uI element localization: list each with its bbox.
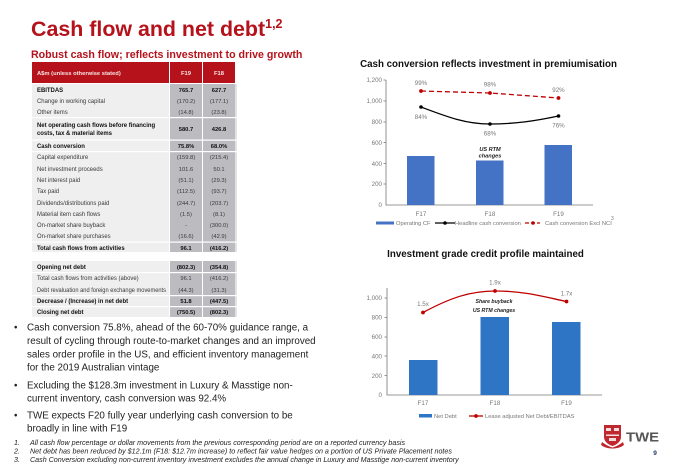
- table cash flow rows: Other items: [37, 110, 68, 116]
- table cash flow rows: [37, 88, 228, 252]
- axis labels: 200: [372, 181, 383, 188]
- data labels: [417, 280, 573, 308]
- table cash flow rows: -: [185, 223, 187, 229]
- legend: [419, 414, 575, 420]
- table cash flow rows: Dividends/distributions paid: [37, 201, 109, 207]
- table cash flow rows: Tax paid: [37, 189, 59, 195]
- icon: crest: [601, 425, 624, 448]
- table cash flow rows: (112.5): [177, 189, 195, 195]
- table cash flow rows: Change in working capital: [37, 99, 105, 105]
- axes: [384, 80, 593, 205]
- line: cash conversion excl NCI: [419, 89, 560, 100]
- footnotes: 2.: [13, 448, 20, 456]
- table cash flow rows: Net investment proceeds: [37, 167, 103, 173]
- table cash flow rows: Net interest paid: [37, 178, 80, 184]
- title: Cash flow and net debt: [31, 17, 265, 41]
- table cash flow rows: Material item cash flows: [37, 212, 100, 218]
- commentary bullets: sales order profile in the US, and efficient inventory management: [27, 350, 309, 360]
- axis labels: 1,000: [367, 98, 383, 105]
- table net debt rows: [37, 265, 228, 316]
- table cash flow rows: 101.6: [179, 167, 193, 173]
- axis labels: 200: [372, 373, 383, 380]
- table cash flow rows: 75.8%: [178, 144, 194, 150]
- table cash flow rows: 426.8: [212, 127, 227, 133]
- axis labels: [367, 77, 564, 218]
- axis labels: 600: [372, 334, 383, 341]
- axis labels: 1,200: [367, 77, 383, 84]
- commentary bullets: [14, 322, 316, 434]
- data labels: 1.7x: [561, 290, 573, 298]
- table cash flow rows: (416.2): [210, 246, 228, 252]
- table cash flow rows: (29.3): [211, 178, 227, 184]
- table upper body shading: [32, 84, 237, 252]
- axis labels: 400: [372, 161, 383, 168]
- table header: F18: [214, 71, 225, 77]
- axis labels: 0: [379, 202, 383, 209]
- title: 1,2: [265, 17, 283, 31]
- axis labels: 0: [379, 392, 383, 399]
- table net debt shading: [32, 261, 237, 317]
- commentary bullets: Cash conversion 75.8%, ahead of the 60-70% guidance range, a: [27, 322, 309, 334]
- table header: F19: [181, 71, 192, 77]
- table cash flow rows: (244.7): [177, 201, 195, 207]
- table cash flow rows: 68.0%: [211, 144, 227, 150]
- commentary bullets: TWE expects F20 fully year underlying cash conversion to be: [27, 410, 293, 422]
- table header: [32, 62, 235, 83]
- page number: 9: [653, 450, 657, 457]
- table net debt rows: (44.3): [178, 288, 194, 294]
- table cash flow rows: (203.7): [210, 201, 228, 207]
- footnotes: Net debt has been reduced by $12.1m (F18: $12.7m increase) to reflect fair value hedges on a portion of US Private Placement notes: [30, 448, 452, 456]
- data labels: [415, 80, 565, 138]
- table header: A$m (unless otherwise stated): [37, 71, 121, 77]
- legend: Headline cash conversion: [455, 221, 521, 227]
- table cash flow rows: costs, tax & material items: [37, 131, 113, 137]
- axis labels: F18: [485, 211, 496, 218]
- table cash flow rows: 627.7: [212, 88, 226, 94]
- table cash flow rows: 765.7: [179, 88, 193, 94]
- table net debt rows: 51.8: [180, 299, 192, 305]
- table net debt rows: 96.1: [180, 276, 192, 282]
- axis labels: [367, 295, 572, 407]
- axis labels: 800: [372, 119, 383, 126]
- table net debt rows: (802.3): [210, 310, 228, 316]
- commentary bullets: Excluding the $128.3m investment in Luxury & Masstige non-: [27, 380, 293, 392]
- table cash flow rows: (1.5): [180, 212, 192, 218]
- commentary bullets: •: [14, 410, 18, 422]
- table cash flow rows: (170.2): [177, 99, 195, 105]
- commentary bullets: •: [14, 380, 18, 392]
- table cash flow rows: Total cash flows from activities: [37, 246, 125, 252]
- line: lease adjusted net debt / EBITDAS: [421, 289, 568, 314]
- table cash flow rows: (16.6): [178, 234, 194, 240]
- table net debt rows: Total cash flows from activities (above): [37, 276, 139, 282]
- panel: cash flow table: [32, 62, 237, 317]
- table cash flow rows: 50.1: [213, 167, 225, 173]
- data labels: 68%: [484, 130, 497, 138]
- table cash flow rows: On-market share purchases: [37, 234, 111, 240]
- data labels: 92%: [552, 87, 565, 94]
- table cash flow rows: (14.8): [178, 110, 194, 116]
- footnotes: All cash flow percentage or dollar movements from the previous corresponding period are on a reported currency basis: [29, 439, 406, 447]
- table net debt rows: Debt revaluation and foreign exchange movements: [37, 288, 166, 294]
- axes: [384, 288, 602, 395]
- table net debt rows: Closing net debt: [37, 310, 84, 316]
- axis labels: 400: [372, 354, 383, 360]
- table cash flow rows: (42.9): [211, 234, 227, 240]
- logo wordmark: TWE: [626, 430, 659, 444]
- table cash flow rows: (159.8): [177, 155, 195, 161]
- data labels: 76%: [552, 122, 565, 130]
- footnotes: 1.: [14, 439, 20, 447]
- table net debt rows: Decrease / (Increase) in net debt: [37, 299, 128, 305]
- commentary bullets: current inventory, cash conversion was 92.4%: [27, 394, 226, 404]
- table net debt rows: (447.5): [210, 299, 228, 305]
- chart heading: cash conversion: Cash conversion reflects investment in premiumisation: [360, 59, 617, 70]
- legend: Lease adjusted Net Debt/EBITDAS: [485, 414, 575, 420]
- data labels: 1.5x: [417, 301, 430, 308]
- commentary bullets: result of cycling through route-to-market changes and an improved: [27, 336, 316, 347]
- table cash flow rows: EBITDAS: [37, 88, 63, 94]
- annotation: share buyback, US RTM changes: [473, 299, 515, 314]
- axis labels: 600: [372, 140, 383, 147]
- footnotes: [13, 439, 459, 464]
- data labels: 84%: [415, 114, 428, 121]
- table net debt rows: (354.8): [210, 265, 228, 271]
- commentary bullets: for the 2019 Australian vintage: [27, 362, 160, 374]
- chart: net debt: [367, 280, 602, 420]
- table cash flow rows: (93.7): [211, 189, 227, 195]
- commentary bullets: •: [14, 322, 18, 334]
- table cash flow rows: (300.0): [210, 223, 228, 229]
- table cash flow rows: Net operating cash flows before financing: [37, 123, 155, 129]
- chart: cash conversion: [367, 77, 614, 227]
- legend: Net Debt: [434, 414, 457, 420]
- table net debt rows: (416.2): [210, 276, 228, 282]
- table cash flow rows: 580.7: [179, 127, 193, 133]
- chart heading: credit profile: Investment grade credit profile maintained: [387, 249, 584, 260]
- axis labels: F19: [553, 211, 564, 218]
- footnotes: Cash Conversion excluding non-current inventory investment excludes the annual change in Luxury and Masstige non-current inventory: [30, 456, 459, 464]
- table cash flow rows: Cash conversion: [37, 144, 85, 150]
- axis labels: 800: [372, 314, 383, 322]
- table cash flow rows: (215.4): [210, 155, 228, 161]
- table cash flow rows: (51.1): [178, 178, 194, 184]
- annotation: US RTM changes: [479, 147, 501, 160]
- bars: net debt: [409, 317, 580, 395]
- annotation: share buyback, US RTM changes: US RTM changes: [473, 308, 515, 314]
- axis labels: F17: [416, 211, 427, 218]
- data labels: 99%: [415, 80, 428, 87]
- table cash flow rows: On-market share buyback: [37, 223, 105, 229]
- axis labels: F19: [561, 400, 572, 407]
- legend: [376, 216, 614, 227]
- table net debt rows: (802.3): [177, 265, 195, 271]
- footnotes: 3.: [14, 456, 20, 464]
- axis labels: 1,000: [367, 295, 383, 302]
- table cash flow rows: (177.1): [210, 99, 228, 105]
- table net debt rows: (31.3): [211, 288, 227, 294]
- bars: operating cash flow: [407, 145, 572, 205]
- logo: TWE: [601, 425, 659, 448]
- table cash flow rows: Capital expenditure: [37, 155, 89, 161]
- table cash flow rows: 96.1: [180, 246, 192, 252]
- legend: Cash conversion Excl NCI: [545, 221, 612, 227]
- annotation: US RTM changes: US RTM: [479, 147, 501, 153]
- axis labels: F17: [418, 400, 429, 407]
- table net debt rows: (750.5): [177, 310, 195, 316]
- axis labels: F18: [490, 400, 501, 407]
- line: headline cash conversion: [419, 105, 560, 126]
- annotation: US RTM changes: changes: [479, 154, 501, 160]
- data labels: 98%: [484, 82, 497, 88]
- subtitle: Robust cash flow; reflects investment to drive growth: [31, 49, 302, 61]
- annotation: share buyback, US RTM changes: Share buyback: [476, 299, 514, 305]
- table net debt rows: Opening net debt: [37, 265, 86, 271]
- table cash flow rows: (8.1): [213, 212, 225, 218]
- data labels: 1.9x: [489, 280, 502, 286]
- table cash flow rows: (23.8): [211, 110, 227, 116]
- legend: Operating CF: [396, 221, 431, 227]
- legend: 3: [611, 216, 614, 222]
- commentary bullets: broadly in line with F19: [27, 424, 127, 434]
